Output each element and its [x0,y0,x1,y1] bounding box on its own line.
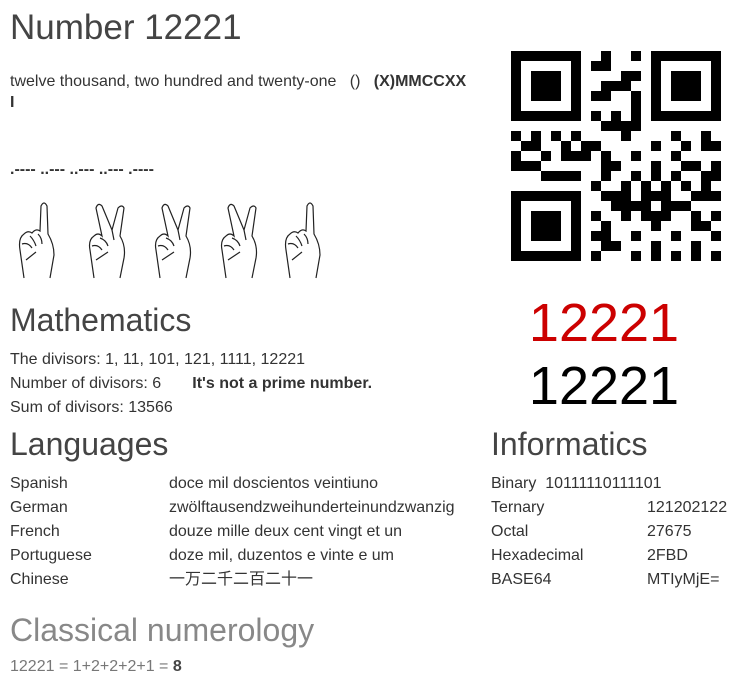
text: Spanish [10,475,68,492]
informatics heading: Informatics [491,426,647,462]
numerology sum: 12221 = 1+2+2+2+1 = 8 [10,658,182,675]
red number: 12221 [529,293,679,353]
languages table [10,475,455,588]
mathematics facts: Sum of divisors: 13566 [10,399,173,416]
text: doce mil doscientos veintiuno [169,475,378,492]
black number: 12221 [529,356,679,416]
text: BASE64 [491,571,551,588]
text: Octal [491,523,528,540]
mathematics heading: Mathematics [10,302,191,338]
text: Ternary [491,499,544,516]
mathematics facts [10,351,372,416]
mathematics facts: The divisors: 1, 11, 101, 121, 1111, 12221 [10,351,305,368]
mathematics facts: Number of divisors: 6 It's not a prime number. [10,375,372,392]
number name text: I [10,94,14,111]
number name text [10,73,466,111]
text: Hexadecimal [491,547,583,564]
morse code: .---- ..--- ..--- ..--- .---- [10,161,154,178]
title: Number 12221 [10,8,242,47]
text: doze mil, duzentos e vinte e um [169,547,394,564]
text: zwölftausendzweihunderteinundzwanzig [169,499,455,516]
text: douze mille deux cent vingt et un [169,523,402,540]
text: Chinese [10,571,69,588]
text: 27675 [647,523,692,540]
number name text: twelve thousand, two hundred and twenty-one () (X)MMCCXX [10,73,466,90]
text: Binary 10111110111101 [491,475,662,492]
QR code [511,51,721,261]
text: 121202122 [647,499,727,516]
text: 2FBD [647,547,688,564]
sign language hands [18,202,321,278]
text: German [10,499,68,516]
text: MTIyMjE= [647,571,719,588]
text: Portuguese [10,547,92,564]
text: 一万二千二百二十一 [169,571,313,588]
text: French [10,523,60,540]
classical numerology heading: Classical numerology [10,612,314,648]
languages heading: Languages [10,426,168,462]
informatics table [491,475,727,588]
